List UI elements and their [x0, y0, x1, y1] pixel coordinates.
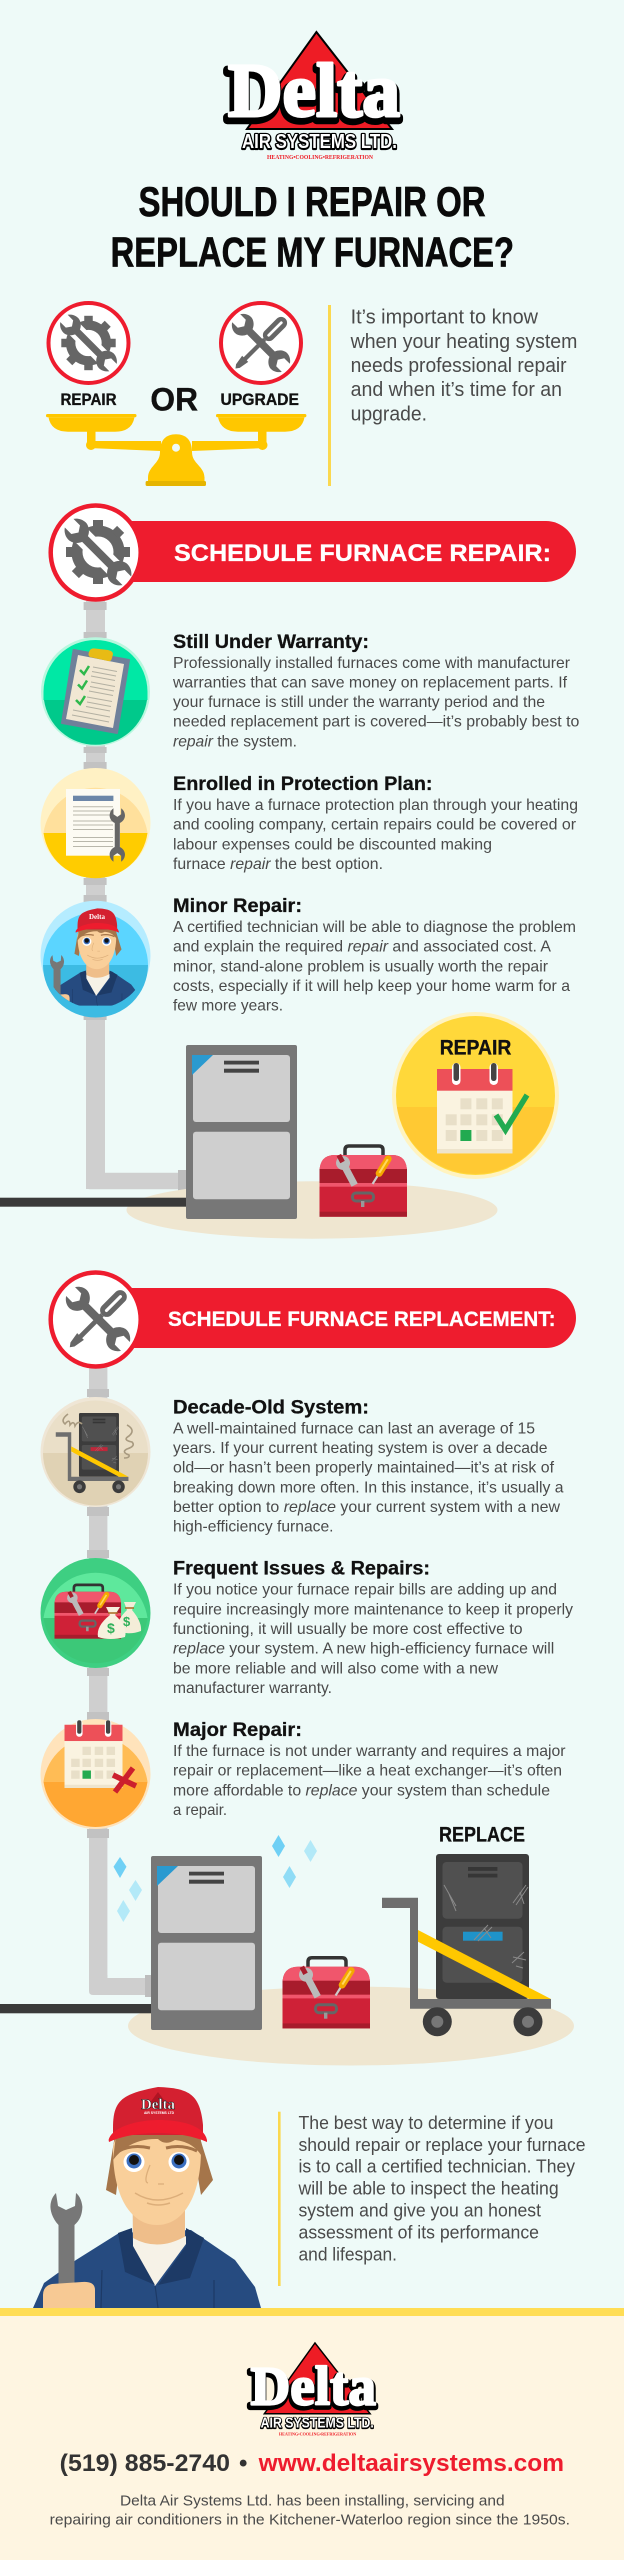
text: decade-old system: breaking down more often. In this instance, it’s usually a [173, 1479, 564, 1496]
intro text: and when it’s time for an [351, 379, 562, 401]
contact line [60, 2450, 564, 2477]
divider: intro [328, 305, 331, 486]
logo: Delta Air Systems: AIR SYSTEMS LTD. [242, 132, 397, 154]
text: decade-old system: Decade-Old System: [173, 1397, 369, 1418]
text: major repair [173, 1720, 566, 1819]
intro text [350, 306, 577, 426]
title [111, 178, 514, 276]
icon: clipboard checklist [41, 637, 150, 746]
footer logo: AIR SYSTEMS LTD. [261, 2416, 374, 2432]
repair or upgrade balance scale [46, 303, 306, 486]
text: minor repair: costs, especially if it will help keep your home warm for a [173, 978, 570, 995]
new furnace [151, 1856, 262, 2030]
footer text [50, 2493, 570, 2528]
text: decade-old system [173, 1397, 564, 1536]
logo: Delta Air Systems: AIR SYSTEMS LTD. [242, 131, 397, 153]
footer panel [0, 2308, 624, 2560]
text: minor repair [173, 896, 576, 1015]
text: frequent issues and repairs [173, 1559, 573, 1697]
text: major repair: If the furnace is not under warranty and requires a major [173, 1743, 566, 1760]
text: enrolled in protection plan: furnace repair the best option. [173, 856, 383, 873]
footer logo: Delta [249, 2359, 376, 2420]
banner heading: SCHEDULE FURNACE REPLACEMENT: [168, 1307, 556, 1331]
text: enrolled in protection plan: If you have a furnace protection plan through your heating [173, 797, 578, 814]
intro text: upgrade. [351, 404, 427, 426]
icon: protection plan document [40, 768, 150, 878]
money bags: $ [123, 1614, 131, 1629]
title: SHOULD I REPAIR OR [138, 178, 486, 225]
intro text: needs professional repair [351, 355, 567, 377]
text: frequent issues and repairs: If you notice your furnace repair bills are adding up and [173, 1582, 557, 1599]
closing text: system and give you an honest [298, 2201, 541, 2221]
icon: calendar with check [437, 1063, 527, 1153]
label: upgrade: UPGRADE [220, 390, 299, 409]
pipe: repair section [84, 600, 186, 1192]
icon: technician portrait: Delta [89, 913, 105, 921]
sparkles [114, 1835, 317, 1922]
text: frequent issues and repairs: be more reliable and will also come with a new [173, 1660, 498, 1677]
banner heading: SCHEDULE FURNACE REPAIR: [174, 540, 551, 567]
icon: gear and wrench badge [51, 506, 141, 600]
text: still under warranty: needed replacement part is covered—it’s probably best to [173, 714, 580, 731]
logo: Delta Air Systems: Delta [228, 49, 400, 133]
banner: schedule furnace replacement [51, 1272, 576, 1366]
black pipe: replacement scene [0, 2004, 151, 2013]
closing text [298, 2113, 586, 2264]
logo: Delta Air Systems: HEATING•COOLING•REFRIGERATION [267, 155, 374, 161]
money bags [98, 1602, 141, 1639]
text: still under warranty: repair the system. [173, 733, 297, 750]
closing text: and lifespan. [298, 2244, 397, 2264]
label: repair: REPAIR [440, 1035, 512, 1059]
text: frequent issues and repairs: Frequent Issues & Repairs: [173, 1559, 430, 1580]
technician illustration: AIR SYSTEMS LTD [144, 2111, 175, 2115]
intro text: when your heating system [350, 331, 577, 353]
contact line: (519) 885-2740 [60, 2450, 230, 2477]
text: minor repair: Minor Repair: [173, 896, 302, 917]
text: major repair: repair or replacement—like a heat exchanger—it’s often [173, 1763, 562, 1780]
logo: Delta Air Systems [226, 32, 400, 161]
technician illustration [33, 2087, 261, 2308]
closing text: should repair or replace your furnace [298, 2135, 586, 2155]
footer logo: Delta [250, 2356, 376, 2417]
text: enrolled in protection plan: and cooling company, certain repairs could be covered or [173, 817, 577, 834]
icon: upgrade wrench and screwdriver [221, 303, 301, 383]
ground shadow: replacement scene [128, 1986, 574, 2066]
black pipe: repair scene [0, 1198, 186, 1207]
footer text: repairing air conditioners in the Kitchener-Waterloo region since the 1950s. [50, 2511, 570, 2528]
closing text: will be able to inspect the heating [298, 2179, 559, 2199]
contact line: www.deltaairsystems.com [258, 2450, 564, 2477]
title: REPLACE MY FURNACE? [111, 229, 514, 276]
old furnace on cart [382, 1854, 551, 2036]
closing text: assessment of its performance [298, 2222, 539, 2242]
text: enrolled in protection plan [173, 774, 578, 873]
text: major repair: Major Repair: [173, 1720, 302, 1741]
text: decade-old system: old—or hasn’t been properly maintained—it’s at risk of [173, 1460, 555, 1477]
text: still under warranty [172, 632, 580, 750]
text: minor repair: minor, stand-alone problem is usually worth the repair [173, 958, 549, 975]
text: decade-old system: A well-maintained furnace can last an average of 15 [173, 1420, 535, 1437]
money bags: $ [107, 1620, 115, 1636]
closing text: The best way to determine if you [298, 2113, 554, 2133]
text: minor repair: A certified technician will be able to diagnose the problem [173, 919, 576, 936]
text: frequent issues and repairs: manufacturer warranty. [173, 1680, 332, 1697]
contact line: • [239, 2450, 247, 2477]
text: frequent issues and repairs: require increasingly more maintenance to keep it properly [173, 1601, 573, 1618]
text: decade-old system: better option to replace your current system with a new [173, 1499, 560, 1516]
technician illustration: Delta [141, 2097, 175, 2113]
text: still under warranty: Still Under Warranty: [173, 632, 369, 653]
text: decade-old system: years. If your current heating system is over a decade [173, 1440, 548, 1457]
toolbox: replacement scene [282, 1958, 370, 2028]
badge: repair calendar [392, 1012, 559, 1179]
banner: schedule furnace repair [51, 506, 576, 600]
divider: closing [278, 2112, 281, 2286]
text: minor repair: few more years. [173, 998, 283, 1015]
icon: repair gear and wrench [48, 303, 128, 383]
text: still under warranty: your furnace is still under the warranty period and the [173, 694, 545, 711]
intro text: It’s important to know [351, 306, 539, 328]
footer logo: HEATING•COOLING•REFRIGERATION [279, 2432, 357, 2437]
text: frequent issues and repairs: replace your system. A new high-efficiency furnace will [173, 1641, 554, 1658]
balance scale [46, 414, 306, 486]
toolbox: repair scene [320, 1146, 407, 1217]
icon: toolbox and money bags [40, 1558, 150, 1668]
footer text: Delta Air Systems Ltd. has been installing, servicing and [120, 2493, 505, 2510]
text: minor repair: and explain the required repair and associated cost. A [173, 939, 551, 956]
furnace: repair scene [186, 1045, 297, 1219]
text: still under warranty: Professionally installed furnaces come with manufacturer [173, 655, 571, 672]
footer logo: AIR SYSTEMS LTD. [261, 2416, 374, 2432]
pipe: replacement section [87, 1366, 151, 1997]
icon: technician portrait [40, 901, 150, 1018]
ground shadow: repair scene [126, 1181, 498, 1239]
label: repair: REPAIR [60, 390, 116, 409]
text: still under warranty: warranties that can save money on replacement parts. If [172, 674, 568, 691]
closing text: is to call a certified technician. They [298, 2157, 575, 2177]
icon: old furnace on cart [40, 1397, 150, 1507]
text: major repair: a repair. [173, 1802, 227, 1819]
text: major repair: more affordable to replace your system than schedule [173, 1782, 550, 1799]
label: replace: REPLACE [439, 1823, 525, 1847]
icon: wrench and screwdriver badge [51, 1272, 141, 1366]
text: enrolled in protection plan: labour expenses could be discounted making [173, 836, 492, 853]
label: or: OR [150, 382, 198, 418]
text: decade-old system: high-efficiency furnace. [173, 1519, 334, 1536]
footer logo [249, 2343, 376, 2437]
icon: calendar with x [40, 1719, 150, 1829]
text: enrolled in protection plan: Enrolled in Protection Plan: [173, 774, 432, 795]
logo: Delta Air Systems: Delta [226, 53, 400, 137]
text: frequent issues and repairs: functioning, it will usually be more cost effective to [173, 1621, 523, 1638]
